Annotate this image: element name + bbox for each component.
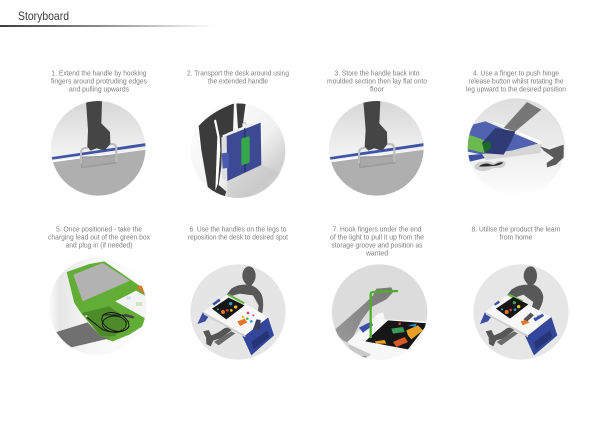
caption: step 6 [188,226,288,242]
caption: step 1: 1. Extend the handle by hooking [52,70,147,78]
illustration: step 1 hand pulling handle [50,100,147,197]
illustration: step 3 storing the handle [328,100,425,197]
caption: step 2 [187,70,289,86]
caption: step 5 [48,226,150,250]
caption: step 7: 7. Hook fingers under the end [332,226,422,234]
caption: step 6: reposition the desk to desired spot [188,234,288,242]
title: Storyboard [18,9,69,23]
caption: step 7 [330,226,424,258]
illustration: step 7 pulling up the light [330,262,430,362]
caption: step 3: floor [370,86,385,94]
caption: step 3: 3. Store the handle back into [334,70,420,78]
illustration: step 6 repositioning the desk [190,264,286,360]
caption: step 5: 5. Once positioned - take the [56,226,142,234]
caption: step 3: moulded section then lay flat onto [327,78,427,86]
caption: step 2: the extended handle [208,78,268,86]
caption: step 5: charging lead out of the green box [48,234,150,242]
caption: step 5: and plug in (if needed) [66,242,132,250]
silhouette: seated person [226,266,264,314]
caption: step 4: leg upward to the desired position [466,86,566,94]
caption: step 7: of the light to pull it up from the [330,234,424,242]
caption: step 1 [51,70,147,94]
silhouette: seated person [506,266,544,310]
caption: step 8: 8. Utilise the product the learn [472,226,561,234]
caption: step 7: wanted [365,250,388,258]
caption: step 1: and pulling upwards [69,86,129,94]
caption: step 3 [327,70,427,94]
caption: step 4: release button whilst rotating the [468,78,564,86]
caption: step 7: storage groove and position as [332,242,423,250]
illustration: step 8 learning from home [473,264,569,360]
caption: step 2: 2. Transport the desk around using [187,70,289,78]
caption: step 1: fingers around protruding edges [51,78,147,86]
caption: step 4 [466,70,566,94]
caption: step 8: from home [500,234,533,242]
illustration: step 5 charging lead [48,258,149,356]
caption: step 8 [472,226,561,242]
illustration: step 2 carrying the folded desk [194,103,286,198]
caption: step 4: 4. Use a finger to push hinge [473,70,559,78]
caption: step 6: 6. Use the handles on the legs to [190,226,287,234]
illustration: step 4 hinge release [468,98,565,176]
